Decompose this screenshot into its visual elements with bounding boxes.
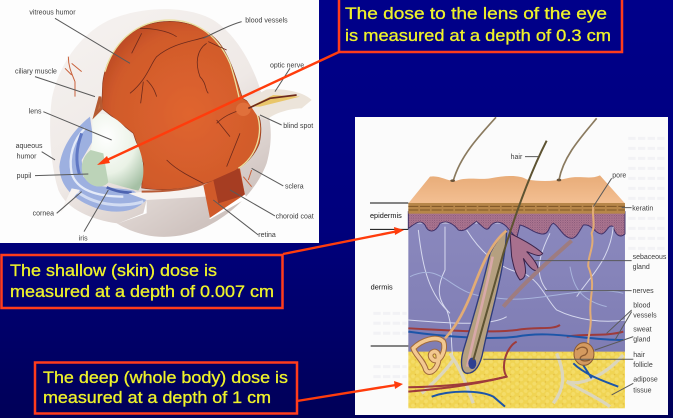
retina interior, red [102,21,261,190]
skin labels: sebaceous [633,254,667,261]
panel: skin anatomy diagram [355,117,668,415]
callout: deep whole body dose [35,362,297,414]
eye labels: cornea [33,211,54,218]
keratin [408,203,625,214]
optic disc [236,103,251,116]
eye labels: sclera [285,183,304,190]
skin labels: tissue [633,387,652,394]
skin surface [408,175,625,203]
skin labels: gland [633,337,651,344]
arrow: deep dose callout to fat layer [297,381,403,401]
epidermis pink layer [408,212,625,238]
skin labels: vessels [633,313,657,320]
blood vessels [130,28,245,183]
callout: shallow skin dose: The shallow (skin) dose is [10,262,217,280]
lens [82,114,143,191]
panel: eye anatomy diagram [0,0,319,243]
hair shafts [473,141,547,360]
callout: lens of the eye dose: is measured at a depth of 0.3 cm [345,27,611,45]
sclera cut flap [203,168,245,218]
skin labels: hair [511,154,523,161]
sebaceous gland [510,233,543,280]
skin labels: gland [633,264,650,271]
skin labels: follicle [633,362,653,369]
callout: shallow skin dose [2,255,282,308]
eye labels: humor [17,154,37,161]
skin labels: pore [612,173,626,180]
erector muscle [445,231,507,338]
callout: lens of the eye dose: The dose to the lens of the eye [345,5,607,23]
eye labels: blind spot [283,123,313,130]
eyeball outer sclera [50,9,271,237]
arrow: lens dose callout to lens [97,52,339,165]
eye labels: retina [258,232,276,239]
cornea and iris, blue [59,117,147,212]
eye labels: ciliary muscle [15,69,57,76]
callout: lens of the eye dose [339,0,622,52]
eye labels: blood vessels [245,18,288,25]
nerves [408,227,625,360]
skin labels: epidermis [370,211,402,220]
cut-away white rim [60,185,206,213]
skin labels: dermis [371,283,393,292]
callout: shallow skin dose: measured at a depth of 0.007 cm [10,283,274,301]
skin labels: keratin [632,206,653,213]
sweat duct [588,205,594,345]
hair follicle [461,231,507,373]
fat layer [408,343,625,408]
skin labels: nerves [633,288,654,295]
blood vessels [408,325,623,407]
skin labels: sweat [633,327,652,334]
surface vessels [65,57,252,187]
eye labels: vitreous humor [29,10,76,17]
eye labels: iris [79,236,88,243]
eye labels: lens [29,108,42,115]
eye labels: choroid coat [276,213,314,220]
eye labels: aqueous [16,143,43,150]
skin leader lines and labels [370,154,667,395]
sweat glands [413,339,444,372]
callout: deep whole body dose: The deep (whole body) dose is [43,369,288,387]
skin labels: blood [633,303,651,310]
dermis [408,223,625,352]
callout: deep whole body dose: measured at a depth of 1 cm [43,389,271,407]
retina yellow edge [105,20,239,98]
eye leader lines and labels [15,10,314,243]
fat strands [422,353,623,407]
ciliary muscle [95,97,102,115]
arrow: shallow dose callout to epidermis [283,227,404,254]
skin labels: hair [633,352,646,359]
eye labels [15,10,314,243]
skin labels: adipose [633,377,658,384]
eye labels: pupil [17,173,32,180]
eye labels: optic nerve [270,63,304,70]
skin labels [370,154,667,394]
optic nerve [247,89,312,120]
